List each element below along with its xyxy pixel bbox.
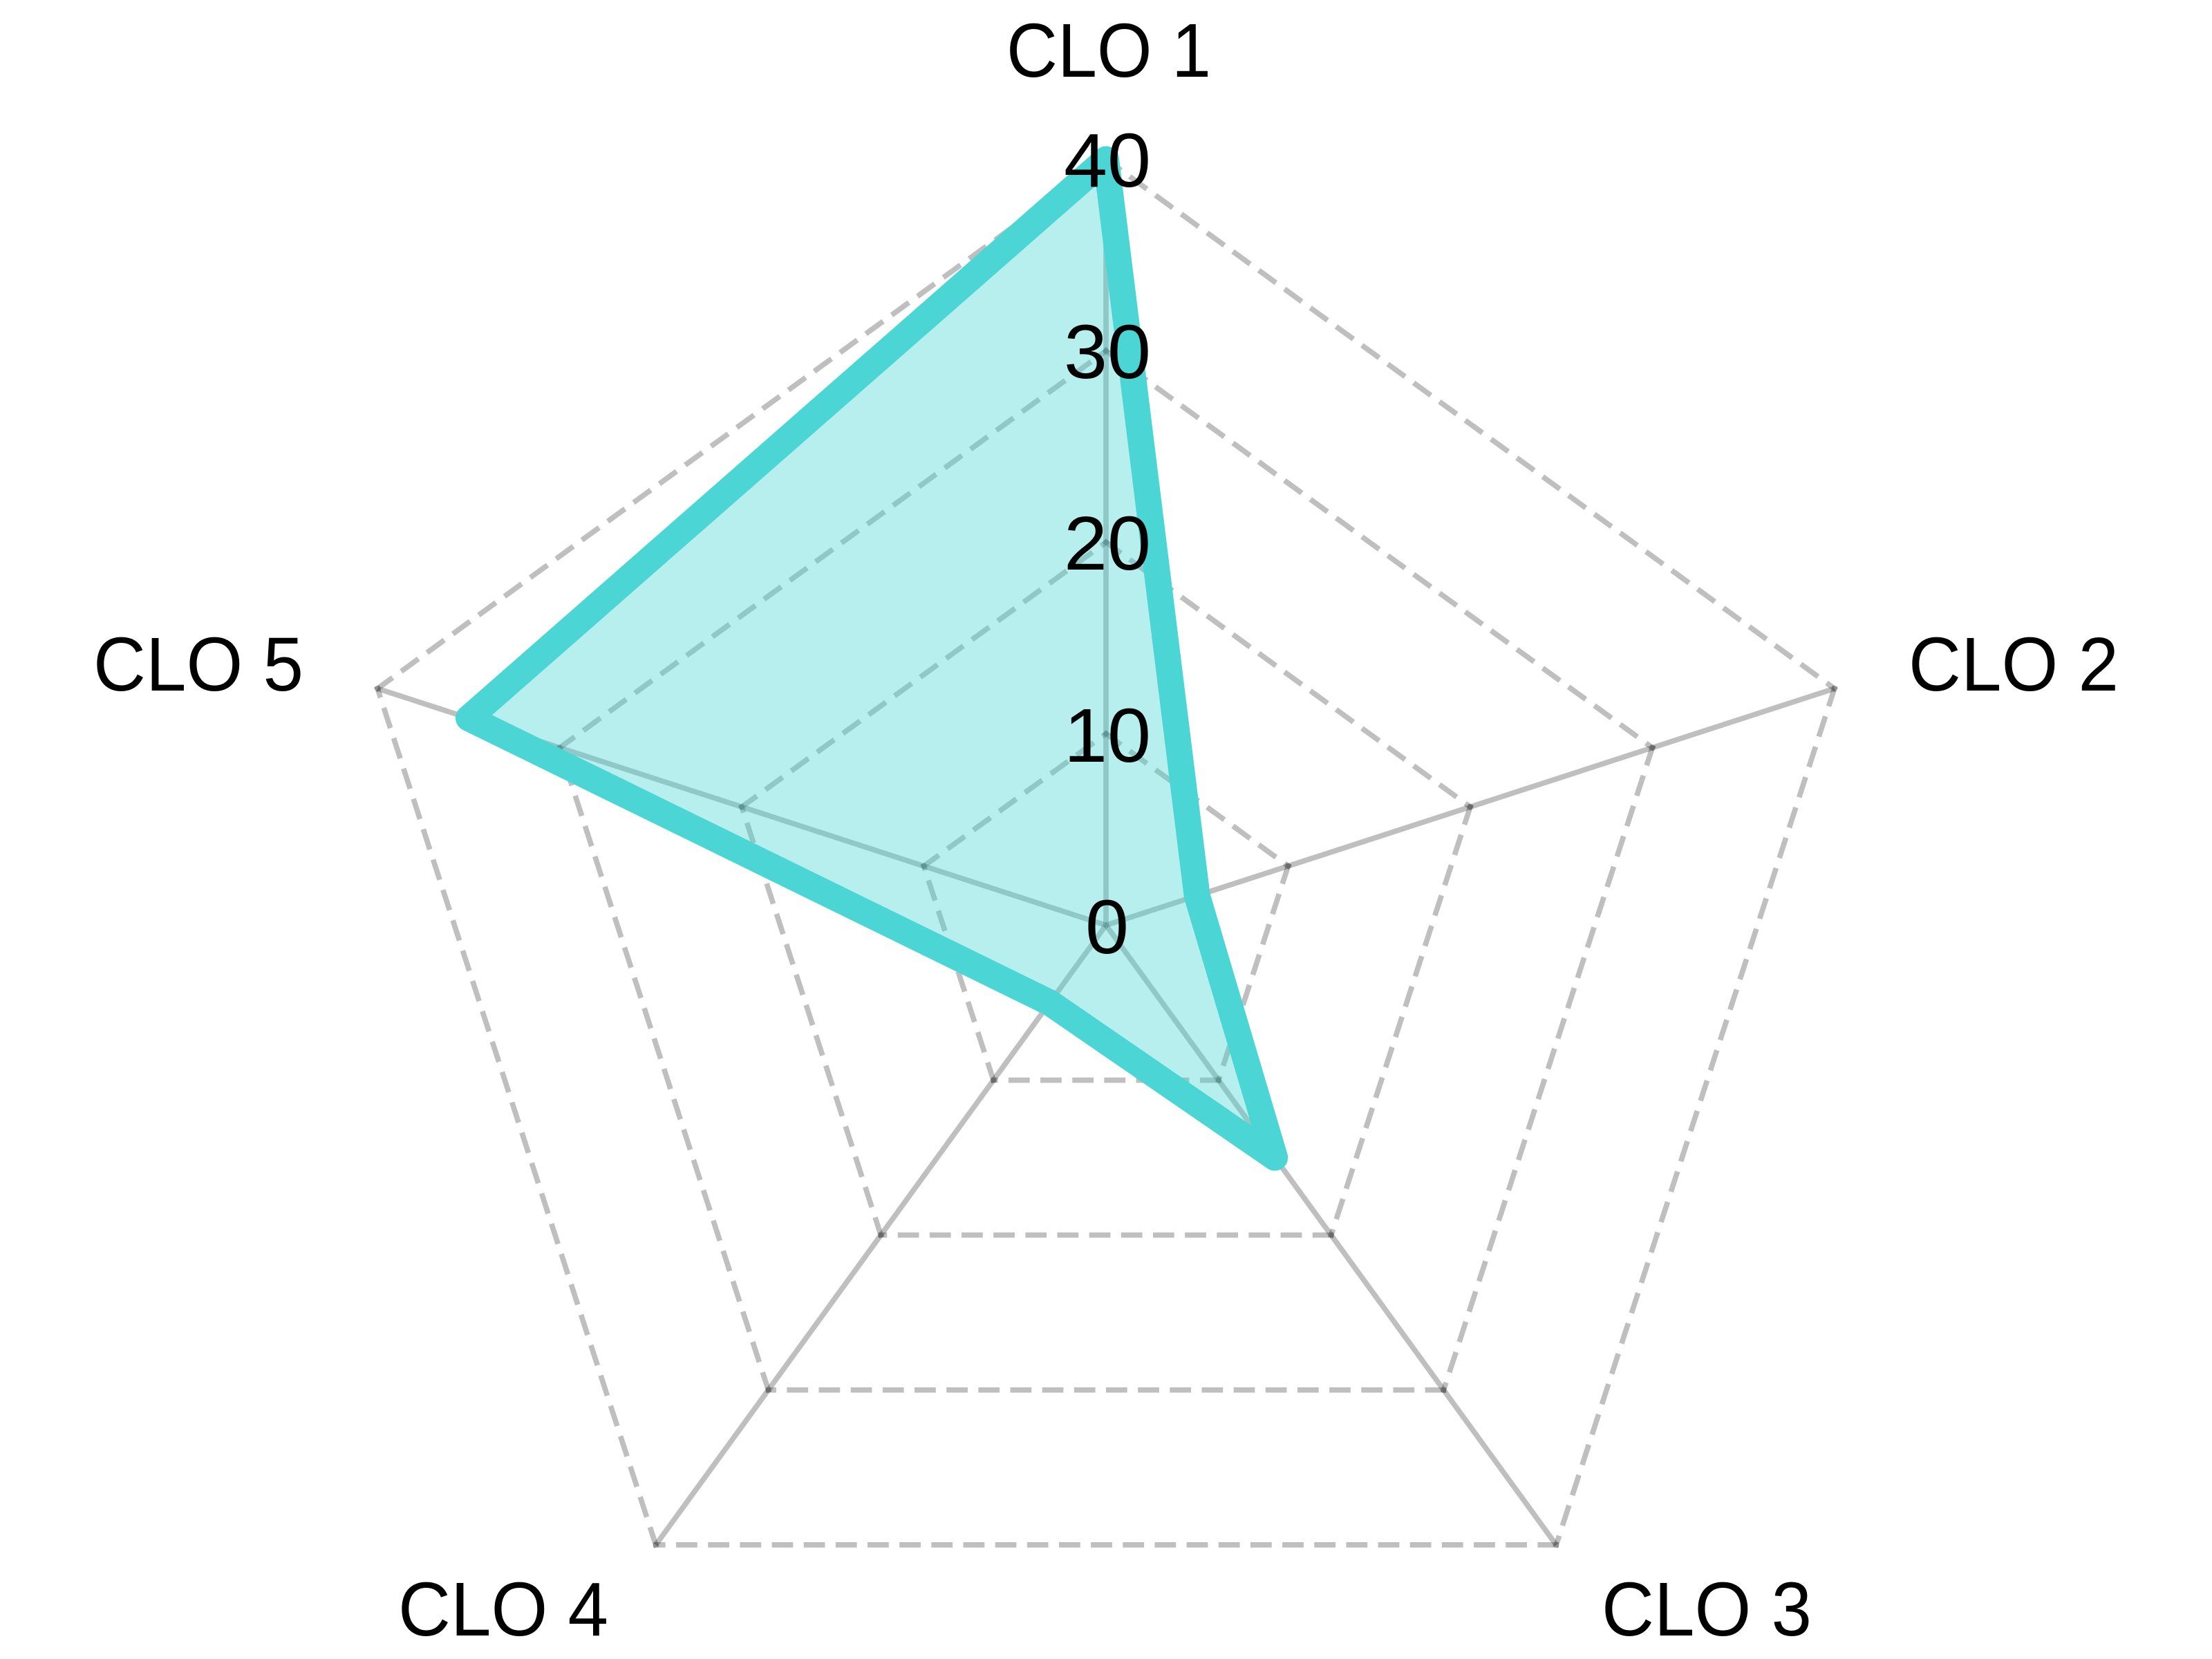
point labels: CLO 4: [398, 1567, 608, 1652]
point labels: CLO 3: [1602, 1567, 1812, 1652]
axis tick labels: 40: [1064, 118, 1151, 203]
axis tick labels: 10: [1064, 693, 1151, 778]
point labels: CLO 2: [1909, 622, 2119, 707]
point labels: CLO 1: [1006, 8, 1211, 93]
axis tick labels: 30: [1064, 310, 1151, 395]
axis tick labels: 20: [1064, 501, 1151, 586]
point labels: CLO 5: [93, 622, 303, 707]
axis tick labels: 0: [1085, 885, 1129, 970]
axis tick labels: [1064, 118, 1151, 970]
data series area: [469, 159, 1275, 1158]
angle lines: [377, 159, 1835, 1545]
dashed grid pentagons: [377, 159, 1835, 1545]
radar grid: [377, 159, 1835, 1545]
